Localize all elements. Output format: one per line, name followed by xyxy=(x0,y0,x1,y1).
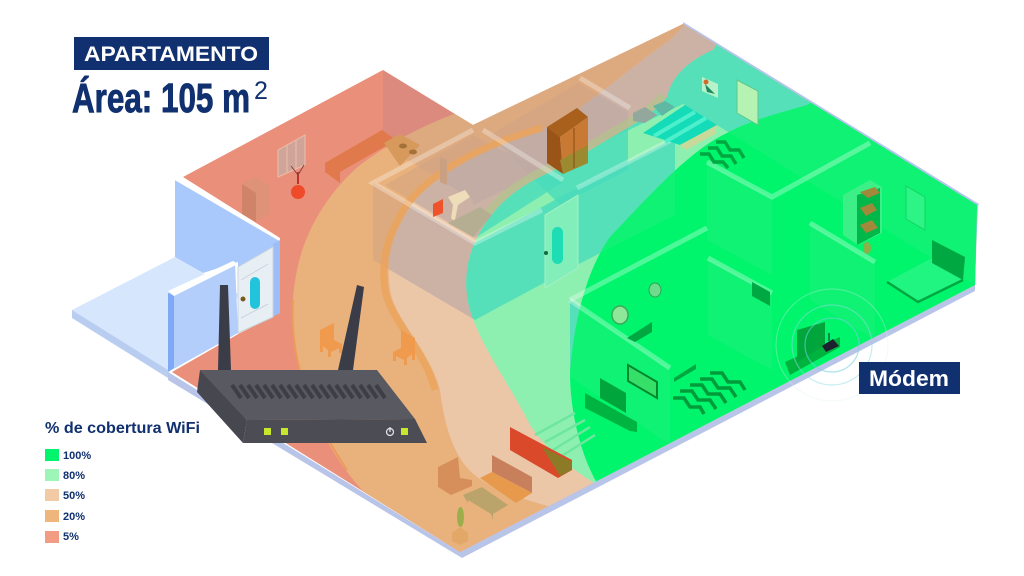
modem xyxy=(822,333,839,352)
sofa xyxy=(480,455,532,503)
area heading: 2 xyxy=(254,77,268,105)
heading badge xyxy=(74,37,269,70)
legend 100% xyxy=(45,449,91,462)
rug upper xyxy=(700,142,744,168)
vase xyxy=(291,165,305,199)
legend 20%: 20% xyxy=(63,511,85,523)
legend 80% xyxy=(45,469,85,482)
legend 100%: 100% xyxy=(63,450,91,462)
bed xyxy=(887,240,965,302)
building outer edge xyxy=(168,22,979,558)
rug lower xyxy=(673,373,745,414)
cabinet xyxy=(242,177,270,222)
wardrobe xyxy=(547,108,588,174)
wifi signal rings xyxy=(776,289,888,401)
shelf xyxy=(627,322,652,342)
pink room furniture xyxy=(242,130,420,222)
coffee table xyxy=(463,487,508,520)
red tv unit xyxy=(510,427,572,478)
side table xyxy=(674,364,696,382)
legend xyxy=(45,420,200,543)
bathroom fixtures xyxy=(433,157,492,237)
chair 1 xyxy=(320,323,342,357)
chairs xyxy=(320,323,415,365)
modem shelf xyxy=(785,322,840,375)
modem label: Módem xyxy=(869,366,949,391)
zone boundary bands xyxy=(293,95,663,470)
kitchen counter xyxy=(325,130,420,183)
legend 5%: 5% xyxy=(63,531,79,543)
entrance blue walls xyxy=(168,177,282,372)
plant xyxy=(452,507,468,545)
window xyxy=(278,135,305,177)
turquoise bed xyxy=(643,105,717,150)
area heading: Área: 105 m xyxy=(72,75,250,121)
picture xyxy=(702,77,718,98)
zone: 20% coverage xyxy=(292,24,977,552)
entrance door xyxy=(238,247,273,333)
modem label xyxy=(859,362,960,394)
vase 2 xyxy=(863,242,871,254)
window xyxy=(906,186,925,230)
interior wall tops xyxy=(373,78,875,368)
bookshelf xyxy=(843,180,882,245)
picture xyxy=(628,365,657,398)
apartment floor with coverage zones xyxy=(172,24,977,552)
zone: 5% coverage xyxy=(172,24,977,552)
living room furniture xyxy=(438,455,532,545)
armchair xyxy=(438,457,472,495)
legend 20% xyxy=(45,510,85,523)
legend 80%: 80% xyxy=(63,470,85,482)
room door xyxy=(544,195,578,288)
router illustration xyxy=(197,285,427,443)
vents xyxy=(232,385,385,398)
zone: 50% coverage xyxy=(388,25,716,506)
green rooms furniture xyxy=(535,142,965,457)
window xyxy=(737,80,758,125)
heading badge: APARTAMENTO xyxy=(84,43,258,66)
legend 50%: 50% xyxy=(63,490,85,502)
LEDs and power icon xyxy=(264,427,408,436)
wall ornament xyxy=(649,283,661,297)
clock xyxy=(612,306,628,324)
legend 50% xyxy=(45,489,85,502)
legend 5% xyxy=(45,531,79,543)
balcony floor xyxy=(72,257,240,378)
zone: 80% coverage xyxy=(466,44,977,483)
chair 2 xyxy=(393,330,415,365)
living tv xyxy=(585,378,637,432)
bedroom 1 furniture xyxy=(633,77,758,150)
striped rug xyxy=(535,413,595,457)
antennas xyxy=(218,285,364,370)
legend title: % de cobertura WiFi xyxy=(45,420,200,437)
router body xyxy=(197,370,427,443)
wall tv unit xyxy=(752,282,770,306)
zone: 100% coverage xyxy=(570,102,977,482)
